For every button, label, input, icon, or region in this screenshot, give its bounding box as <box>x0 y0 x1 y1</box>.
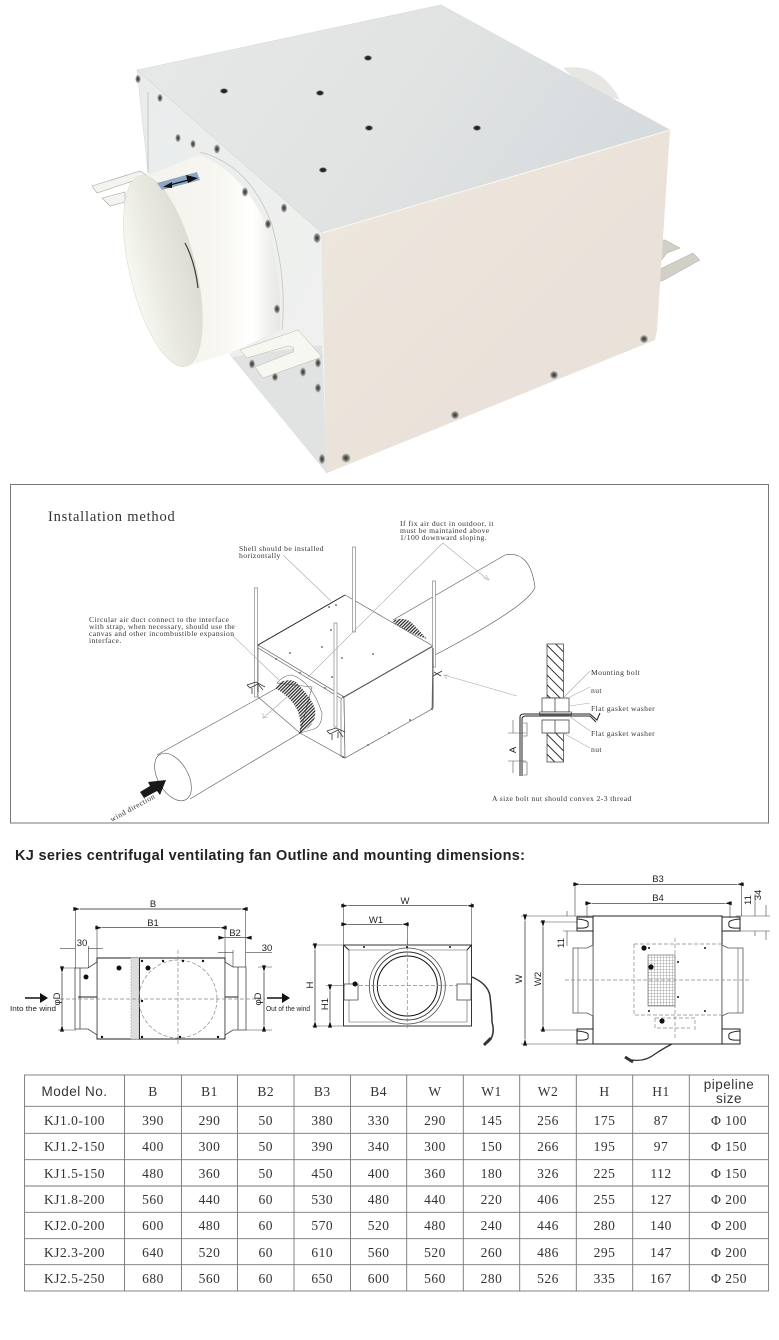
row KJ2.5-250: 526 <box>537 1271 559 1286</box>
row KJ1.2-150: 50 <box>258 1139 273 1154</box>
row KJ2.5-250: 680 <box>142 1271 164 1286</box>
side view dimensions: 30 <box>77 938 87 949</box>
callout: outdoor duct: If fix air duct in outdoor, it <box>400 519 494 528</box>
row KJ1.0-100: 50 <box>258 1113 273 1128</box>
row KJ1.2-150: 195 <box>594 1139 615 1154</box>
side view body <box>60 950 265 1045</box>
row KJ1.5-150: 180 <box>481 1166 502 1181</box>
row KJ2.0-200: 600 <box>142 1218 164 1233</box>
row KJ1.5-150: KJ1.5-150 <box>44 1166 105 1181</box>
row KJ1.8-200: 440 <box>424 1192 446 1207</box>
row KJ1.8-200: Φ 200 <box>711 1192 747 1207</box>
row KJ2.5-250: 560 <box>199 1271 220 1286</box>
row KJ2.3-200: 560 <box>368 1245 389 1260</box>
row KJ1.5-150: 360 <box>424 1166 446 1181</box>
end view dimensions: W <box>401 896 410 907</box>
top view dimensions: 11 <box>743 895 754 905</box>
row KJ2.0-200: KJ2.0-200 <box>44 1218 105 1233</box>
wind direction label: wind direction <box>109 792 157 824</box>
row KJ2.5-250: Φ 250 <box>711 1271 747 1286</box>
callout: outdoor duct <box>400 519 494 585</box>
airflow out <box>266 993 310 1013</box>
row KJ2.3-200: 520 <box>199 1245 220 1260</box>
airflow arrow sticker <box>157 172 200 190</box>
row KJ1.8-200: KJ1.8-200 <box>44 1192 105 1207</box>
row KJ1.8-200: 560 <box>142 1192 164 1207</box>
row KJ2.0-200 <box>44 1218 747 1233</box>
row KJ1.2-150: Φ 150 <box>711 1139 747 1154</box>
top face <box>137 5 670 233</box>
top view dimensions: W <box>514 974 525 983</box>
row KJ1.5-150: 50 <box>258 1166 273 1181</box>
callout: circular air duct <box>89 615 279 680</box>
inner fan slit <box>185 243 198 288</box>
row KJ2.5-250 <box>44 1271 747 1286</box>
right mounting brackets <box>658 240 700 282</box>
row KJ1.2-150: 266 <box>537 1139 559 1154</box>
end view dimensions <box>305 896 472 1026</box>
row KJ1.2-150: 300 <box>424 1139 446 1154</box>
row KJ1.2-150: 300 <box>199 1139 220 1154</box>
row KJ2.0-200: 446 <box>537 1218 559 1233</box>
row KJ1.8-200: 255 <box>594 1192 615 1207</box>
row KJ1.0-100: 256 <box>537 1113 559 1128</box>
table header: B <box>148 1084 158 1099</box>
top view dimensions: B4 <box>652 893 664 904</box>
row KJ1.8-200: 127 <box>650 1192 672 1207</box>
top view dimensions: 11 <box>556 938 567 948</box>
row KJ2.0-200: 140 <box>650 1218 672 1233</box>
table header: B1 <box>201 1084 218 1099</box>
row KJ1.2-150: 150 <box>481 1139 502 1154</box>
wind direction arrow <box>140 780 166 798</box>
flange <box>277 675 322 733</box>
row KJ2.3-200: KJ2.3-200 <box>44 1245 105 1260</box>
row KJ2.5-250: 60 <box>258 1271 273 1286</box>
row KJ2.3-200: 60 <box>258 1245 273 1260</box>
row KJ1.0-100: 87 <box>654 1113 668 1128</box>
row KJ1.5-150 <box>44 1166 747 1181</box>
side view dimensions: B1 <box>147 918 159 929</box>
row KJ1.2-150: 390 <box>311 1139 333 1154</box>
table header: pipeline <box>704 1077 754 1092</box>
table header: H <box>599 1084 610 1099</box>
row KJ1.8-200: 480 <box>368 1192 389 1207</box>
row KJ2.3-200: 147 <box>650 1245 672 1260</box>
row KJ1.5-150: Φ 150 <box>711 1166 747 1181</box>
row KJ1.5-150: 400 <box>368 1166 389 1181</box>
row KJ2.3-200: Φ 200 <box>711 1245 747 1260</box>
rear duct <box>393 554 535 655</box>
callout: circular air duct: Circular air duct connect to the interface <box>89 615 230 624</box>
side view dimensions: B <box>150 899 156 910</box>
top view dimensions: 34 <box>753 890 764 900</box>
row KJ1.2-150 <box>44 1139 747 1154</box>
row KJ2.0-200: 570 <box>311 1218 333 1233</box>
edge screws <box>135 75 648 464</box>
row KJ1.8-200: 406 <box>537 1192 559 1207</box>
airflow in: Into the wind <box>10 1004 56 1013</box>
end view body <box>344 940 493 1045</box>
row KJ2.5-250: 650 <box>311 1271 333 1286</box>
row KJ1.0-100: KJ1.0-100 <box>44 1113 105 1128</box>
row KJ2.5-250: KJ2.5-250 <box>44 1271 105 1286</box>
side view dimensions: B2 <box>229 928 241 939</box>
row KJ2.3-200: 486 <box>537 1245 559 1260</box>
table header: size <box>716 1091 742 1106</box>
product photo: ventilating fan box <box>92 5 700 473</box>
end view dimensions: H <box>305 981 316 988</box>
left mounting brackets <box>92 171 148 206</box>
front duct <box>147 675 322 807</box>
row KJ1.0-100: 380 <box>311 1113 333 1128</box>
row KJ1.5-150: 450 <box>311 1166 333 1181</box>
row KJ2.3-200: 520 <box>424 1245 446 1260</box>
flange seam <box>200 152 283 330</box>
callout: circular air duct: interface. <box>89 636 122 645</box>
long callout leader <box>308 585 400 677</box>
mounting bolt detail: nut <box>591 745 602 754</box>
row KJ2.0-200: 480 <box>424 1218 446 1233</box>
table grid <box>24 1075 768 1291</box>
row KJ2.0-200: Φ 200 <box>711 1218 747 1233</box>
row KJ1.2-150: 340 <box>368 1139 389 1154</box>
row KJ1.5-150: 480 <box>142 1166 164 1181</box>
table header: W1 <box>481 1084 502 1099</box>
row KJ2.3-200: 295 <box>594 1245 615 1260</box>
airflow out: Out of the wind <box>266 1004 310 1013</box>
installation heading: Installation method <box>48 509 176 525</box>
mounting bolt detail: Flat gasket washer <box>591 729 655 738</box>
row KJ2.5-250: 560 <box>424 1271 446 1286</box>
detail note: A size bolt nut should convex 2-3 thread <box>492 794 632 803</box>
top view dimensions <box>514 874 770 1044</box>
callout: circular air duct: canvas and other incombustible expansion <box>89 629 234 638</box>
top view body <box>565 916 750 1062</box>
isometric fan and duct drawing <box>109 547 535 824</box>
side view dimensions: 30 <box>262 943 272 954</box>
table header <box>41 1077 754 1106</box>
row KJ2.5-250: 167 <box>650 1271 672 1286</box>
row KJ2.0-200: 60 <box>258 1218 273 1233</box>
row KJ2.3-200: 260 <box>481 1245 502 1260</box>
left face <box>137 70 327 473</box>
row KJ1.2-150: KJ1.2-150 <box>44 1139 105 1154</box>
callout: circular air duct: with strap, when necessary, should use the <box>89 622 235 631</box>
end view dimensions: H1 <box>320 998 331 1010</box>
mounting clips <box>247 671 442 740</box>
row KJ1.8-200: 440 <box>199 1192 220 1207</box>
side view dimensions: φD <box>52 992 63 1006</box>
table header: Model No. <box>41 1084 108 1099</box>
row KJ2.0-200: 480 <box>199 1218 220 1233</box>
row KJ1.8-200 <box>44 1192 747 1207</box>
section heading: KJ series centrifugal ventilating fan Outline and mounting dimensions: <box>15 848 525 864</box>
duct mouth <box>108 168 218 374</box>
end view dimensions: W1 <box>369 915 383 926</box>
right face <box>322 130 670 473</box>
hanging rods <box>254 547 436 727</box>
top view drawing <box>514 874 770 1062</box>
table header: W <box>428 1084 442 1099</box>
row KJ2.5-250: 335 <box>594 1271 615 1286</box>
row KJ2.3-200: 640 <box>142 1245 164 1260</box>
callout: outdoor duct: must be maintained above <box>400 526 490 535</box>
side view dimensions <box>52 899 272 1030</box>
mounting bolt detail: Flat gasket washer <box>591 704 655 713</box>
row KJ2.0-200: 520 <box>368 1218 389 1233</box>
callout: shell horizontal: Shell should be installed <box>239 544 324 553</box>
panel: installation method <box>10 484 768 824</box>
row KJ1.0-100: 290 <box>424 1113 446 1128</box>
back duct <box>563 67 620 100</box>
top view dimensions: W2 <box>533 972 544 986</box>
rear hatch <box>392 619 427 639</box>
row KJ1.0-100 <box>44 1113 747 1128</box>
mounting bolt detail: Mounting bolt <box>591 668 641 677</box>
table header: B4 <box>370 1084 387 1099</box>
side view dimensions: φD <box>253 992 264 1006</box>
mounting bolt detail: A <box>508 746 519 753</box>
table header: H1 <box>652 1084 670 1099</box>
row KJ1.2-150: 400 <box>142 1139 164 1154</box>
fan box <box>258 595 433 758</box>
row KJ1.5-150: 360 <box>199 1166 220 1181</box>
side view drawing <box>10 899 310 1045</box>
end view drawing <box>305 896 493 1045</box>
row KJ1.5-150: 326 <box>537 1166 559 1181</box>
row KJ1.8-200: 530 <box>311 1192 333 1207</box>
row KJ1.5-150: 225 <box>594 1166 615 1181</box>
row KJ1.0-100: Φ 100 <box>711 1113 747 1128</box>
row KJ1.8-200: 220 <box>481 1192 502 1207</box>
front duct collar <box>142 155 280 366</box>
table header: W2 <box>538 1084 558 1099</box>
front mounting bracket <box>240 330 322 378</box>
row KJ1.8-200: 60 <box>258 1192 273 1207</box>
callout: outdoor duct: 1/100 downward sloping. <box>400 533 487 542</box>
row KJ2.5-250: 280 <box>481 1271 502 1286</box>
row KJ1.0-100: 175 <box>594 1113 615 1128</box>
top screws <box>220 55 481 173</box>
flexible connector hatch <box>275 680 315 734</box>
row KJ1.5-150: 112 <box>650 1166 672 1181</box>
row KJ2.3-200: 610 <box>311 1245 333 1260</box>
mounting bolt detail: nut <box>591 686 602 695</box>
table header: B2 <box>257 1084 274 1099</box>
callout: shell horizontal <box>239 544 331 601</box>
row KJ1.2-150: 97 <box>654 1139 668 1154</box>
row KJ2.0-200: 240 <box>481 1218 502 1233</box>
row KJ2.3-200 <box>44 1245 747 1260</box>
airflow in <box>10 993 56 1013</box>
row KJ1.0-100: 290 <box>199 1113 220 1128</box>
callout: shell horizontal: horizontally <box>239 551 281 560</box>
table header: B3 <box>314 1084 331 1099</box>
row KJ2.0-200: 280 <box>594 1218 615 1233</box>
row KJ2.5-250: 600 <box>368 1271 389 1286</box>
row KJ1.0-100: 390 <box>142 1113 164 1128</box>
row KJ1.0-100: 330 <box>368 1113 389 1128</box>
dimensions table <box>24 1075 768 1291</box>
mounting bolt detail <box>444 644 655 776</box>
top view dimensions: B3 <box>652 874 664 885</box>
row KJ1.0-100: 145 <box>481 1113 502 1128</box>
